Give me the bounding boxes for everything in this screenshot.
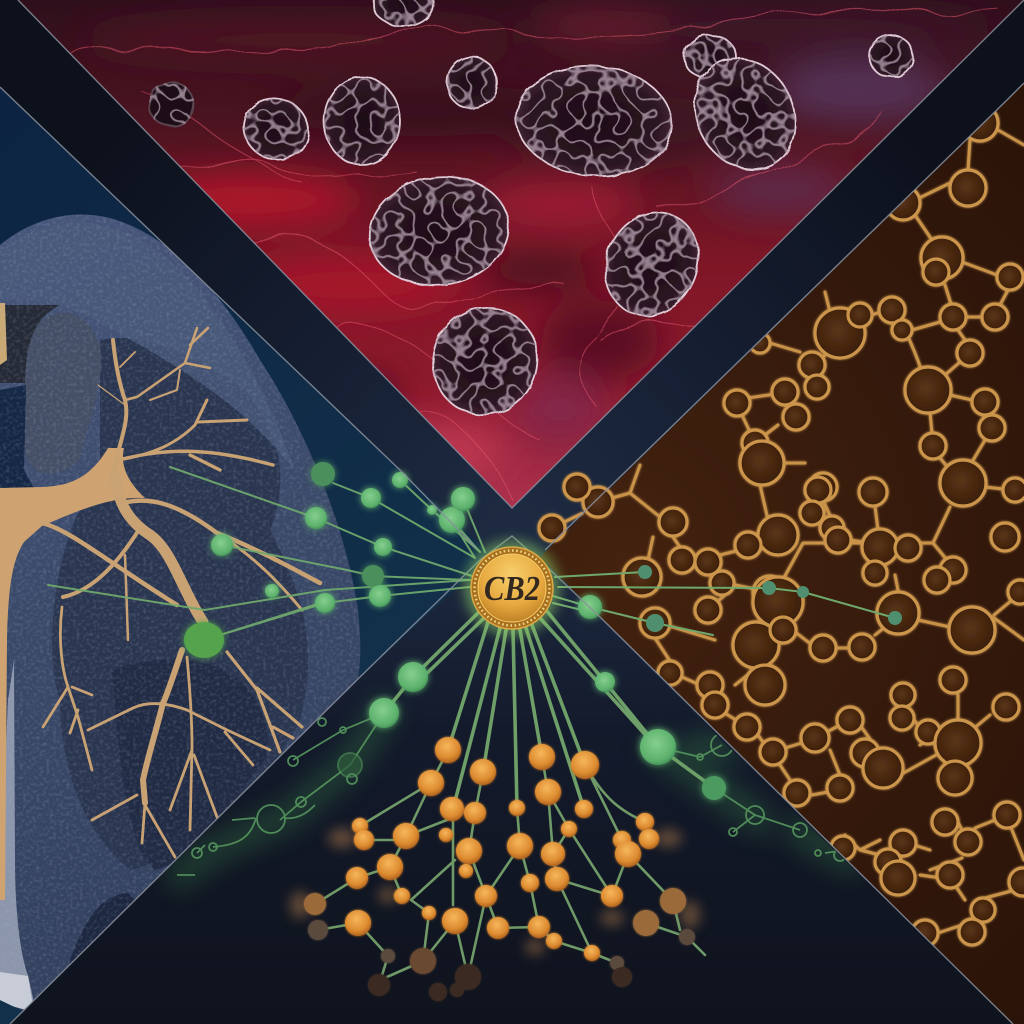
lower left branch — [43, 607, 92, 770]
dark lower crease — [70, 893, 135, 968]
green lines: bottom fan — [384, 610, 714, 809]
orange nodes — [304, 737, 695, 1001]
cell — [373, 0, 433, 26]
cell — [693, 56, 796, 172]
cells — [149, 0, 913, 432]
panel: blue lung with bronchial tree — [0, 80, 500, 1024]
panel: brown molecular network — [520, 80, 1024, 1024]
faint rings — [257, 805, 285, 833]
lung shape — [0, 200, 370, 1024]
dim nodes — [308, 920, 695, 970]
CB2 hub coin — [464, 540, 560, 636]
cell — [447, 57, 497, 109]
trachea highlight — [0, 303, 7, 365]
overlap bonds — [552, 492, 590, 528]
upper lobe crescent highlight — [128, 322, 294, 469]
green lines: right fan — [553, 572, 895, 635]
green side glows — [180, 713, 850, 875]
coin face — [478, 554, 546, 622]
cell — [869, 35, 913, 77]
cell — [149, 82, 193, 126]
cell — [604, 212, 700, 318]
faint green side network — [177, 713, 846, 875]
cell — [368, 176, 510, 287]
right node — [578, 595, 602, 619]
cell — [324, 77, 400, 165]
inner dark cavity — [52, 338, 308, 870]
central descending branch — [115, 475, 203, 622]
teal nodes on molecule network — [638, 565, 902, 632]
white base — [0, 972, 32, 1010]
bronchial tree — [0, 328, 320, 900]
bottom left nodes — [398, 662, 428, 692]
molecule rings overlapping the band — [539, 474, 613, 541]
main trunk — [0, 448, 145, 900]
coin beads — [474, 550, 550, 626]
medium brown nodes — [304, 888, 686, 936]
molecule bonds — [612, 130, 1024, 933]
faint orange glows — [290, 828, 700, 955]
lung texture — [0, 200, 370, 1024]
faint links — [280, 713, 384, 820]
lung junction blob — [184, 622, 224, 658]
lower main branch — [143, 650, 182, 803]
inner grey lobe — [23, 312, 101, 474]
hilum opening — [0, 385, 34, 488]
molecule network — [612, 105, 1024, 946]
green lines: left fan into lung — [48, 467, 485, 640]
cell — [684, 35, 736, 79]
coin glow — [464, 540, 560, 636]
left nodes — [311, 462, 335, 486]
cell — [242, 98, 310, 161]
middle branches — [118, 400, 247, 460]
pale lower edge strip — [0, 660, 36, 1012]
cell — [432, 306, 538, 416]
panel: red tissue with cells — [0, 0, 1024, 520]
orange node links — [315, 750, 705, 985]
coin rim — [471, 547, 553, 629]
molecule rings — [623, 105, 1024, 946]
dark hilum top — [0, 305, 60, 383]
dark lower patch — [112, 660, 268, 870]
panel: dark network with orange nodes — [10, 536, 1013, 1024]
tissue colour blotches — [80, 6, 1000, 472]
upper branches — [113, 340, 126, 470]
bright orange nodes — [345, 737, 659, 961]
bottom right nodes — [595, 672, 615, 692]
tissue veins — [60, 7, 1000, 500]
cell — [514, 64, 674, 178]
fading nodes — [368, 948, 632, 1001]
overlap rings — [539, 474, 613, 541]
coin label: CB2 — [484, 569, 540, 608]
green nodes — [184, 462, 726, 800]
